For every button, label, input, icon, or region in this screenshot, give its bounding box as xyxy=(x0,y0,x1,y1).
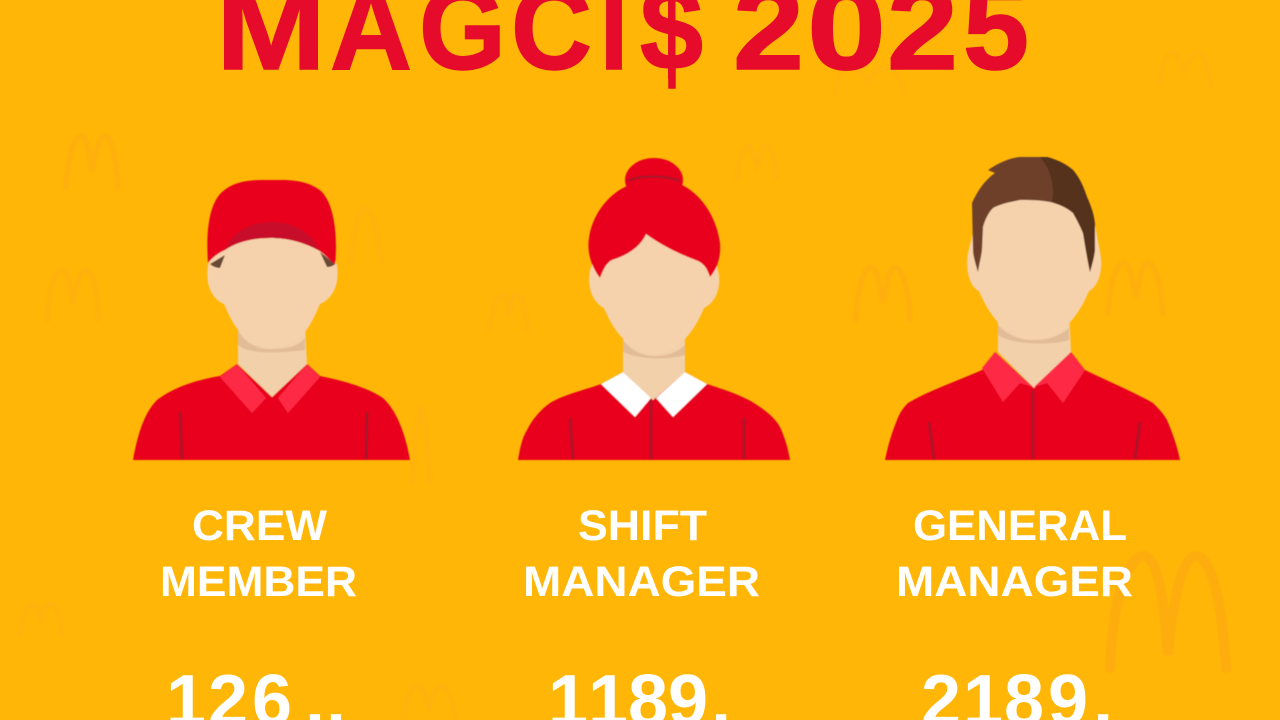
label: crew member xyxy=(160,502,357,606)
label: general manager xyxy=(896,502,1133,606)
shirt seams xyxy=(180,412,367,459)
figure: crew member xyxy=(133,180,410,460)
cap xyxy=(207,180,336,265)
label: shift manager: MANAGER xyxy=(523,558,760,606)
figure: shift manager xyxy=(518,158,790,460)
face xyxy=(589,232,719,354)
neck shadow xyxy=(623,340,685,358)
cap band xyxy=(225,222,320,251)
bun xyxy=(625,158,683,202)
watermark: large arches logo xyxy=(1110,556,1226,668)
neck xyxy=(998,310,1071,388)
label: general manager: GENERAL xyxy=(913,502,1127,550)
collar xyxy=(982,352,1085,403)
label: shift manager xyxy=(523,502,760,606)
title xyxy=(216,0,1029,95)
neck shadow xyxy=(998,325,1069,344)
shirt xyxy=(133,364,410,460)
shirt xyxy=(885,352,1180,460)
hair tie xyxy=(628,176,680,181)
figure: general manager xyxy=(885,157,1180,460)
hair tufts xyxy=(210,252,335,268)
hair xyxy=(972,157,1095,272)
label: crew member: MEMBER xyxy=(160,558,357,606)
label: crew member: CREW xyxy=(192,502,327,550)
shirt xyxy=(518,372,790,460)
label: general manager: MANAGER xyxy=(896,558,1133,606)
shirt seams xyxy=(570,400,744,459)
neck xyxy=(623,330,685,400)
shirt seams xyxy=(929,390,1140,459)
hair xyxy=(588,181,720,278)
neck shadow xyxy=(238,330,305,352)
hair shadow xyxy=(1040,157,1095,272)
collar xyxy=(220,364,320,413)
collar xyxy=(601,372,707,417)
label: shift manager: SHIFT xyxy=(578,502,707,550)
neck xyxy=(238,325,307,397)
face xyxy=(967,198,1101,340)
face xyxy=(207,238,338,347)
